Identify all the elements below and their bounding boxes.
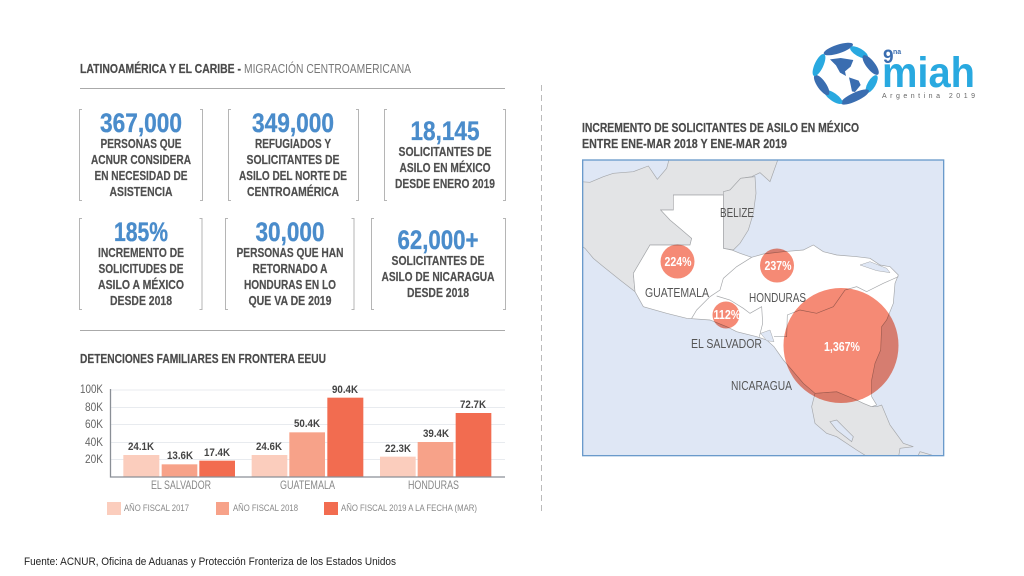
logo: 9na miah Argentina 2019: na: [893, 49, 901, 56]
bar chart: family detentions: 22.3K: [385, 443, 411, 455]
panel: 367,000: ACNUR CONSIDERA: [91, 152, 191, 167]
panel: 185%: INCREMENTO DE: [98, 245, 184, 260]
panel: 349,000: REFUGIADOS Y: [255, 136, 331, 151]
legend: AÑO FISCAL 2018: [233, 503, 298, 514]
bar chart: family detentions: 24.1K: [128, 441, 154, 453]
panel: 185%: 185%: [114, 217, 168, 247]
panel: 349,000: CENTROAMÉRICA: [247, 184, 339, 199]
logo: 9na miah Argentina 2019: [810, 40, 975, 107]
logo: 9na miah Argentina 2019: Argentina 2019: [882, 93, 975, 100]
bar chart: family detentions: 13.6K: [167, 450, 193, 462]
title: [80, 61, 411, 76]
panel: 185%: [80, 217, 202, 310]
bar chart: family detentions: 17.4K: [204, 447, 230, 459]
map: Central America: [580, 158, 944, 458]
panel: 367,000: ASISTENCIA: [110, 184, 173, 199]
bar chart: family detentions: 50.4K: [294, 418, 320, 430]
panel: 62,000+: ASILO DE NICARAGUA: [382, 269, 495, 284]
panel: 185%: DESDE 2018: [110, 293, 172, 308]
title: LATINOAMÉRICA Y EL CARIBE -: [80, 61, 241, 76]
circle: Nicaragua 1,367%: [784, 288, 898, 403]
panel: 367,000: 367,000: [100, 108, 182, 138]
label: NICARAGUA: NICARAGUA: [731, 378, 792, 393]
panel: 349,000: SOLICITANTES DE: [246, 152, 340, 167]
legend: [107, 502, 477, 515]
panel: 18,145: 18,145: [410, 116, 480, 146]
bar chart: family detentions: [80, 382, 505, 492]
bar chart: family detentions: GUATEMALA: [280, 478, 335, 492]
bar chart: family detentions: 20K: [85, 452, 103, 466]
heading: asylum seekers map: ENTRE ENE-MAR 2018 Y ENE-MAR 2019: [582, 136, 787, 151]
panel: 367,000: [80, 108, 202, 200]
label: BELIZE: BELIZE: [720, 205, 754, 220]
bar chart: family detentions: 90.4K: [332, 384, 358, 396]
circle: Nicaragua 1,367%: 1,367%: [824, 340, 860, 354]
panel: 62,000+: SOLICITANTES DE: [392, 253, 485, 268]
panel: 367,000: EN NECESIDAD DE: [94, 168, 188, 183]
panel: 62,000+: DESDE 2018: [407, 285, 469, 300]
bar chart: family detentions: 60K: [85, 417, 103, 431]
panel: 18,145: ASILO EN MÉXICO: [400, 160, 490, 175]
panel: 185%: SOLICITUDES DE: [98, 261, 184, 276]
bar chart: family detentions: 40K: [85, 435, 103, 449]
logo: 9na miah Argentina 2019: 9: [883, 47, 894, 68]
bar chart: family detentions: 72.7K: [460, 399, 486, 411]
circle: El Salvador 112%: [712, 302, 740, 328]
panel: 30,000: RETORNADO A: [252, 261, 328, 276]
icon: globe with ring of hands: [810, 40, 881, 107]
panel: 349,000: [228, 108, 358, 200]
label: HONDURAS: HONDURAS: [749, 290, 806, 305]
bar chart: family detentions: 100K: [80, 382, 103, 396]
legend: AÑO FISCAL 2019 A LA FECHA (MAR): [341, 503, 477, 514]
bar chart: family detentions: HONDURAS: [408, 478, 459, 492]
panel: 62,000+: 62,000+: [398, 225, 478, 255]
label: EL SALVADOR: EL SALVADOR: [691, 336, 762, 351]
panel: 349,000: ASILO DEL NORTE DE: [239, 168, 347, 183]
circle: Guatemala 224%: 224%: [664, 255, 692, 269]
panel: 62,000+: [372, 218, 506, 310]
title: MIGRACIÓN CENTROAMERICANA: [244, 61, 411, 76]
label: GUATEMALA: GUATEMALA: [645, 285, 709, 300]
circle: Guatemala 224%: [660, 244, 694, 278]
bar chart: family detentions: 24.6K: [256, 441, 282, 453]
circle: Honduras 237%: 237%: [764, 259, 792, 273]
heading: asylum seekers map: INCREMENTO DE SOLICITANTES DE ASILO EN MÉXICO: [582, 120, 859, 135]
heading: asylum seekers map: [582, 120, 859, 151]
circle: Honduras 237%: [760, 248, 794, 282]
panel: 349,000: 349,000: [252, 108, 334, 138]
panel: 18,145: DESDE ENERO 2019: [395, 176, 495, 191]
panel: 30,000: QUE VA DE 2019: [248, 293, 332, 308]
bar chart: family detentions: 80K: [85, 400, 103, 414]
source note: Fuente: ACNUR, Oficina de Aduanas y Protección Fronteriza de los Estados Unidos: [24, 556, 396, 568]
panel: 30,000: 30,000: [256, 217, 324, 247]
panel: 30,000: PERSONAS QUE HAN: [236, 245, 344, 260]
panel: 18,145: [384, 110, 506, 200]
heading: family detentions chart: DETENCIONES FAMILIARES EN FRONTERA EEUU: [80, 351, 326, 366]
legend: AÑO FISCAL 2017: [124, 503, 189, 514]
panel: 30,000: HONDURAS EN LO: [244, 277, 336, 292]
panel: 367,000: PERSONAS QUE: [100, 136, 182, 151]
circle: El Salvador 112%: 112%: [714, 308, 740, 322]
panel: 18,145: SOLICITANTES DE: [398, 144, 492, 159]
logo: 9na miah Argentina 2019: miah: [882, 49, 975, 97]
bar chart: family detentions: 39.4K: [423, 428, 449, 440]
panel: 30,000: [226, 217, 354, 310]
panel: 185%: ASILO A MÉXICO: [98, 277, 184, 292]
bar chart: family detentions: EL SALVADOR: [151, 478, 211, 492]
